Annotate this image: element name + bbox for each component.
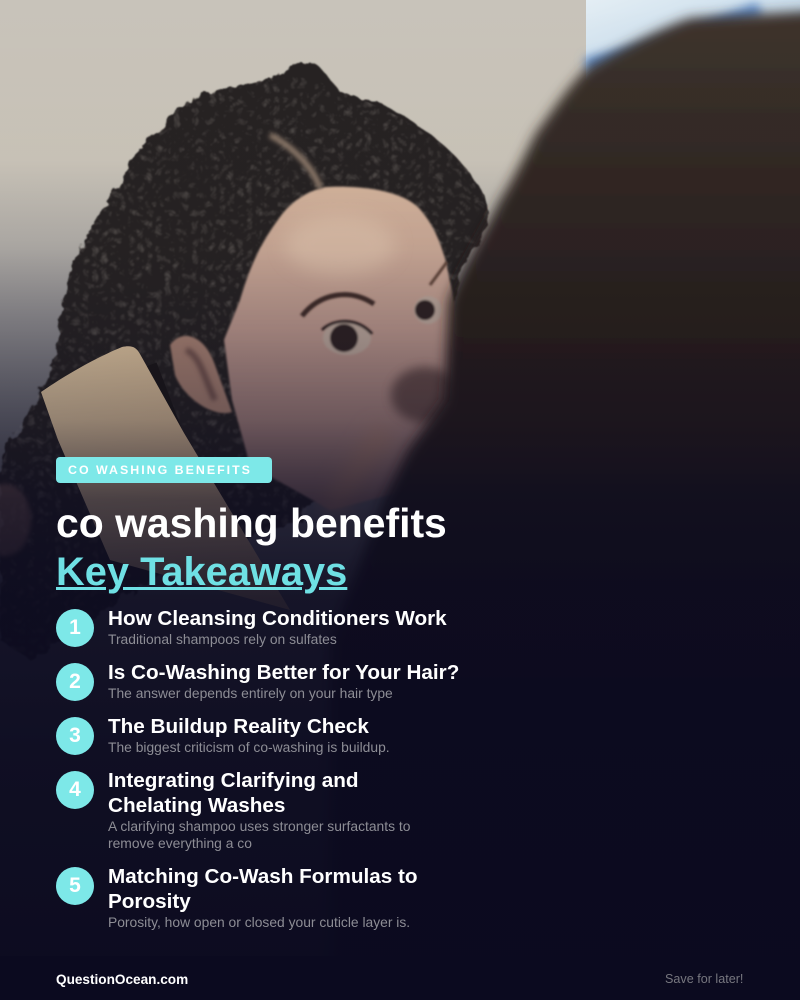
face <box>224 187 460 510</box>
hair tie <box>150 365 190 470</box>
item 3: 3 <box>69 724 81 747</box>
item 5 <box>56 865 418 930</box>
item 4: Integrating Clarifying and <box>108 769 359 792</box>
window <box>586 0 800 80</box>
footer brand: QuestionOcean.com <box>56 972 188 987</box>
hair texture <box>0 77 490 660</box>
item 4 <box>56 769 410 851</box>
eyebrow left <box>302 295 374 316</box>
window blue band <box>586 10 760 66</box>
item 4: remove everything a co <box>108 835 252 851</box>
scalp parting <box>270 135 320 188</box>
item 2: The answer depends entirely on your hair type <box>108 685 393 701</box>
item 3 <box>56 715 390 755</box>
badge <box>56 457 272 483</box>
foreground blurred head <box>330 8 800 1000</box>
item 1: Traditional shampoos rely on sulfates <box>108 631 337 647</box>
footer bar <box>0 956 800 1000</box>
item 4: A clarifying shampoo uses stronger surfactants to <box>108 818 410 834</box>
item 4: Chelating Washes <box>108 794 285 817</box>
item 1: 1 <box>69 616 81 639</box>
eye left <box>322 321 372 355</box>
item 5: 5 <box>69 874 81 897</box>
main title: co washing benefits <box>56 500 447 546</box>
ear inner <box>186 350 215 400</box>
brush <box>41 346 290 610</box>
left hand <box>0 484 31 556</box>
item 3: The biggest criticism of co-washing is buildup. <box>108 739 390 755</box>
item 1 <box>56 607 447 647</box>
eye right <box>414 296 442 324</box>
item 1: How Cleansing Conditioners Work <box>108 607 447 630</box>
item 2 <box>56 661 459 701</box>
item 5: Matching Co-Wash Formulas to <box>108 865 418 888</box>
footer note: Save for later! <box>665 972 743 986</box>
item 2: Is Co-Washing Better for Your Hair? <box>108 661 459 684</box>
item 2: 2 <box>69 670 81 693</box>
item 4: 4 <box>69 778 81 801</box>
ear <box>170 336 232 413</box>
forehead highlight <box>285 215 395 275</box>
badge: CO WASHING BENEFITS <box>68 463 252 477</box>
eyebrow right <box>430 262 447 285</box>
item 5: Porosity, how open or closed your cuticle layer is. <box>108 914 410 930</box>
finger <box>330 430 385 510</box>
item 3: The Buildup Reality Check <box>108 715 369 738</box>
subtitle: Key Takeaways <box>56 550 347 594</box>
back hair <box>0 60 490 660</box>
nose shadow <box>391 367 459 423</box>
item 5: Porosity <box>108 890 191 913</box>
